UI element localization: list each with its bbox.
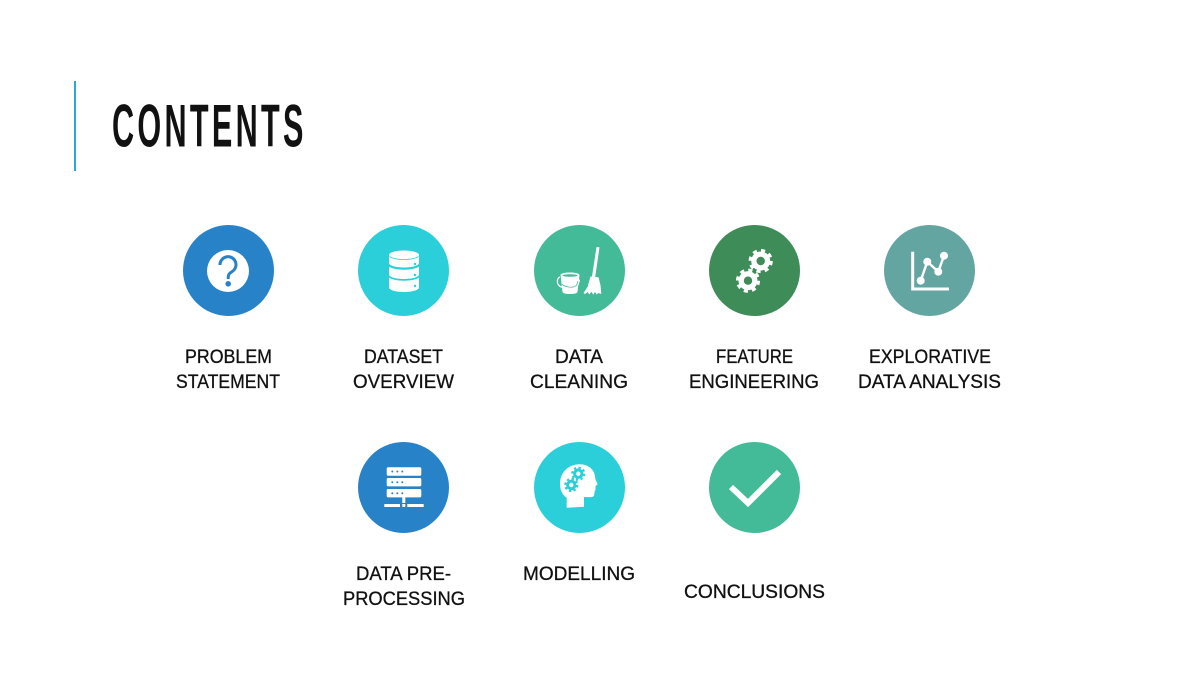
- icon: check mark: [709, 442, 800, 533]
- item: feature engineering: [689, 225, 819, 393]
- label: data cleaning: [530, 346, 628, 393]
- icon: head with gears: [534, 442, 625, 533]
- item: data cleaning: [530, 225, 628, 393]
- icon: line chart: [884, 225, 975, 316]
- item: conclusions: [684, 442, 825, 603]
- item: modelling: [523, 442, 635, 585]
- title: CONTENTS: [112, 94, 307, 160]
- item: explorative data analysis: [858, 225, 1001, 393]
- icon: bucket and broom: [534, 225, 625, 316]
- label: dataset overview: [353, 346, 455, 393]
- label: explorative data analysis: EXPLORATIVE: [869, 346, 991, 368]
- label: data cleaning: DATA: [555, 346, 603, 368]
- label: problem statement: [176, 346, 280, 393]
- label: dataset overview: DATASET: [364, 346, 443, 368]
- label: feature engineering: FEATURE: [716, 346, 793, 368]
- label: explorative data analysis: DATA ANALYSIS: [858, 371, 1001, 393]
- item: problem statement: [176, 225, 280, 393]
- label: dataset overview: OVERVIEW: [353, 371, 455, 393]
- title accent bar: [74, 81, 76, 171]
- icon: question mark: [183, 225, 274, 316]
- icon: database: [358, 225, 449, 316]
- label: problem statement: PROBLEM: [185, 346, 272, 368]
- label: data pre-processing: DATA PRE-: [356, 563, 451, 585]
- item: dataset overview: [353, 225, 455, 393]
- label: data cleaning: CLEANING: [530, 371, 628, 393]
- label: data pre-processing: PROCESSING: [343, 588, 465, 610]
- icon: gears: [709, 225, 800, 316]
- item: data pre-processing: [343, 442, 465, 610]
- label: data pre-processing: [343, 563, 465, 610]
- label: feature engineering: ENGINEERING: [689, 371, 819, 393]
- label: problem statement: STATEMENT: [176, 371, 280, 393]
- label: feature engineering: [689, 346, 819, 393]
- label: modelling: MODELLING: [523, 563, 635, 585]
- label: conclusions: CONCLUSIONS: [684, 581, 825, 603]
- label: explorative data analysis: [858, 346, 1001, 393]
- icon: server: [358, 442, 449, 533]
